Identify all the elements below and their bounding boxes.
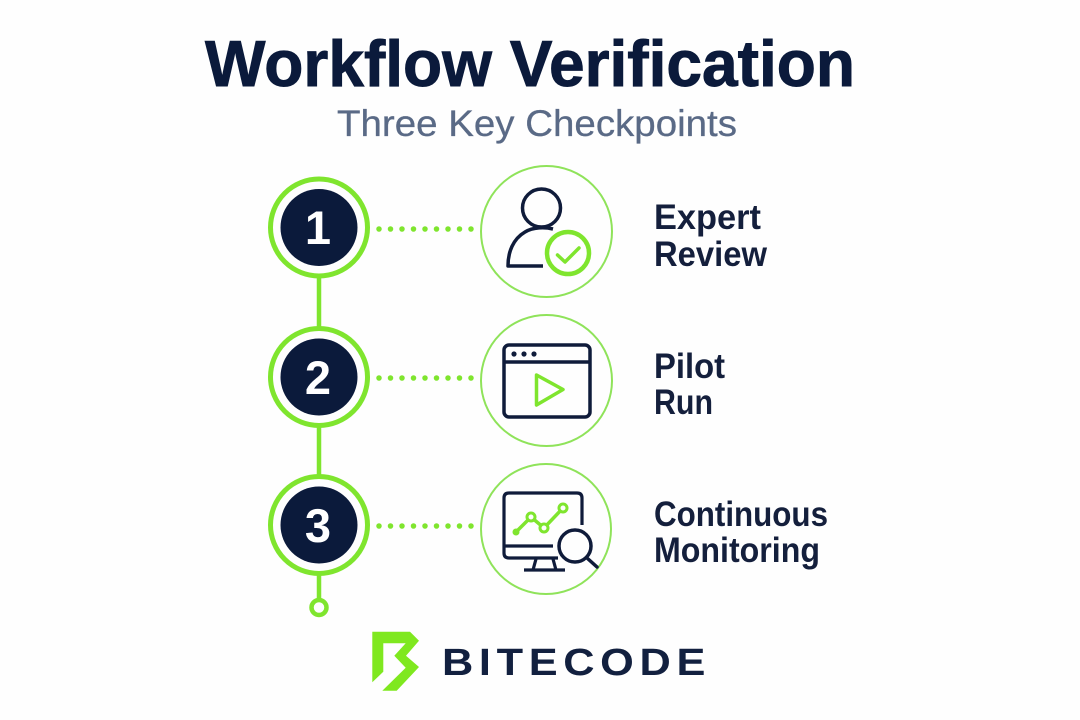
step 3 label (654, 495, 828, 570)
step 2 dotted connector (379, 375, 472, 381)
title: Workflow Verification (205, 27, 855, 100)
step 3 label: Continuous (654, 495, 828, 534)
step 3 number badge (270, 476, 368, 574)
step 3 label: Monitoring (654, 531, 820, 570)
step 3 number badge: 3 (305, 499, 331, 552)
subtitle: Three Key Checkpoints (337, 103, 737, 144)
step 3 (270, 464, 828, 594)
icon: expert with check mark (481, 166, 612, 297)
logo wordmark: BITECODE (442, 640, 705, 683)
step 2 label: Run (654, 383, 713, 422)
step 2 label (654, 347, 725, 422)
step 2 number badge (270, 328, 368, 426)
timeline connector (312, 275, 326, 615)
icon: monitor with chart and magnifier (481, 464, 611, 594)
step 1 label (654, 198, 768, 274)
step 1 label: Expert (654, 198, 761, 237)
step 1 (270, 166, 768, 297)
icon: browser window with play button (481, 315, 612, 446)
logo mark (372, 632, 419, 691)
step 1 number badge (270, 179, 368, 276)
step 1 label: Review (654, 235, 768, 274)
step 1 dotted connector (379, 226, 472, 232)
step 1 number badge: 1 (305, 201, 331, 254)
step 2 (270, 315, 725, 446)
step 3 dotted connector (379, 523, 472, 529)
step 2 label: Pilot (654, 347, 725, 386)
step 2 number badge: 2 (305, 351, 331, 404)
logo (372, 632, 705, 691)
